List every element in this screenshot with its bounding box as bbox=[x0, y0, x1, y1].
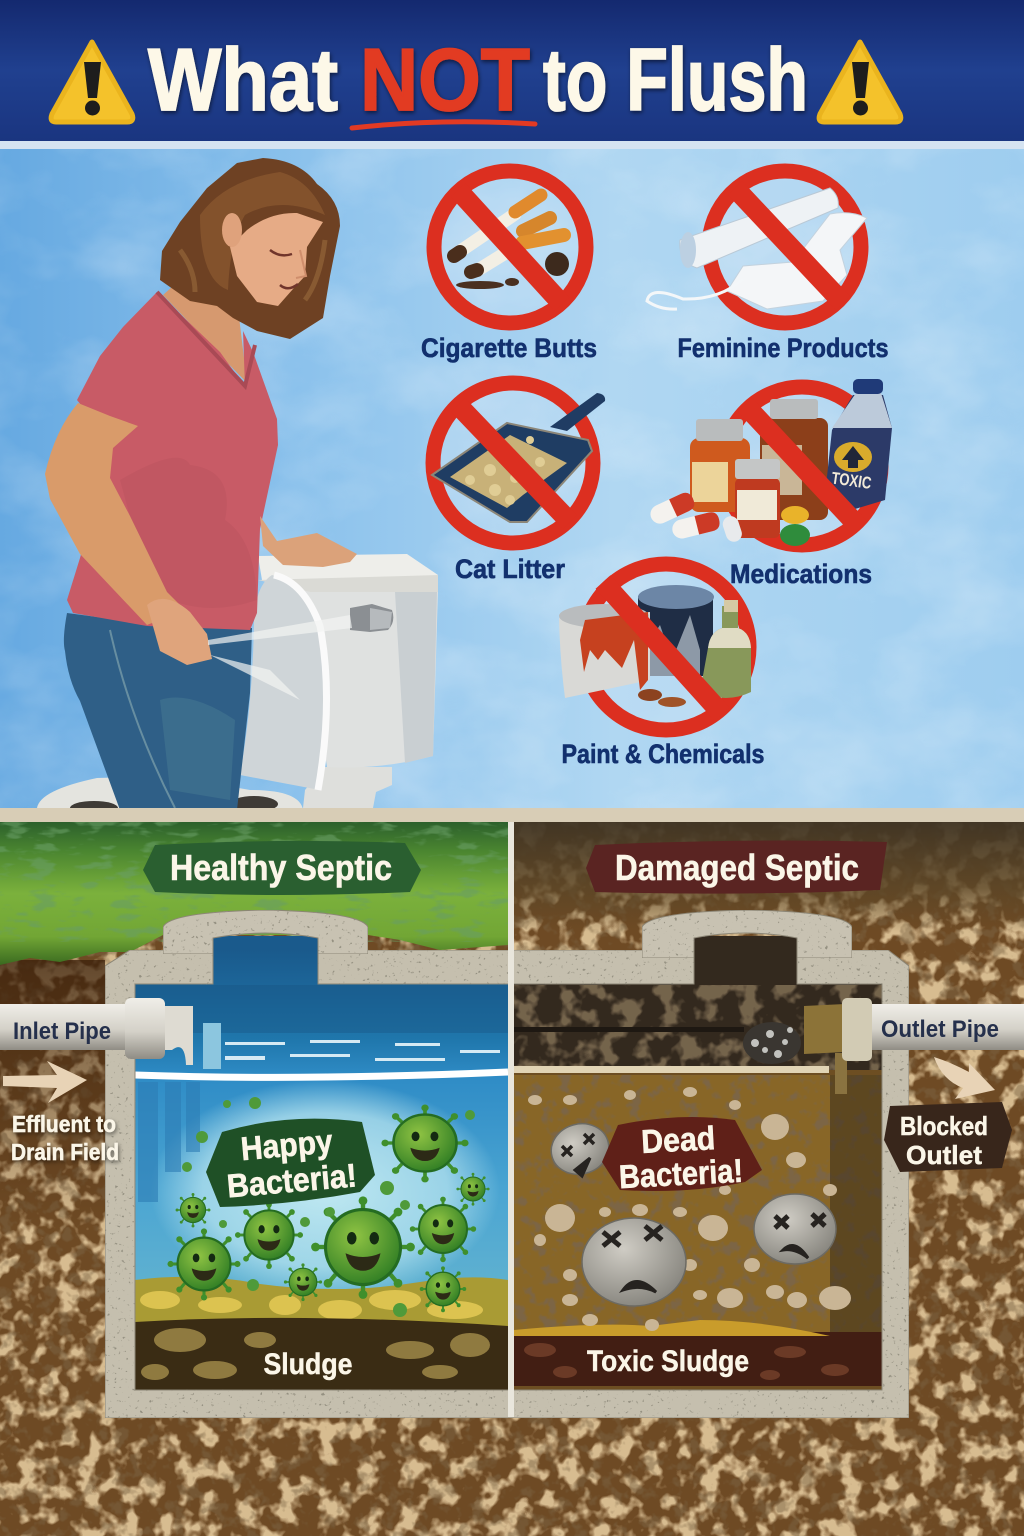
arrow: effluent bbox=[3, 1061, 87, 1103]
inlet drain streaks bbox=[138, 1082, 200, 1202]
right arm and hand bbox=[260, 516, 357, 567]
header banner bbox=[0, 0, 1024, 149]
inlet pipe: Inlet Pipe bbox=[13, 1018, 111, 1045]
icon: warning triangle right bbox=[819, 42, 901, 122]
label: effluent bbox=[11, 1111, 119, 1165]
grass bbox=[0, 822, 508, 965]
center divider bbox=[508, 822, 514, 1417]
prohibition slash bbox=[735, 188, 843, 303]
left hand bbox=[147, 599, 212, 665]
icon: litter scoop bbox=[432, 393, 605, 522]
label: healthy septic: Healthy Septic bbox=[170, 847, 392, 888]
title: What bbox=[148, 30, 338, 129]
label: healthy septic bbox=[143, 841, 421, 895]
label: blocked outlet: Outlet bbox=[906, 1140, 982, 1170]
label: happy bacteria: Happy bbox=[239, 1122, 335, 1167]
panel: sky background bbox=[0, 149, 1024, 809]
panel: damaged tank interior bbox=[514, 936, 884, 1390]
surface ripples bbox=[225, 1040, 500, 1061]
flush tube streaks bbox=[208, 615, 352, 700]
label: happy bacteria bbox=[206, 1119, 375, 1207]
neck bbox=[163, 286, 247, 383]
concrete access collar left bbox=[163, 910, 368, 954]
label: Medications bbox=[730, 559, 872, 589]
concrete tank walls bbox=[105, 950, 909, 1418]
prohibition ring bbox=[723, 387, 881, 545]
label: dead bacteria bbox=[602, 1117, 762, 1195]
label: happy bacteria: Bacteria! bbox=[225, 1156, 358, 1205]
panel: healthy tank interior bbox=[135, 936, 508, 1390]
outlet pipe: Outlet Pipe bbox=[881, 1016, 999, 1043]
label: effluent: Drain Field bbox=[11, 1139, 119, 1165]
label: effluent: Effluent to bbox=[12, 1111, 116, 1137]
concrete access collar right bbox=[642, 910, 852, 958]
shirt bbox=[67, 292, 278, 630]
ear bbox=[222, 213, 242, 247]
label: Feminine Products bbox=[678, 333, 888, 363]
icon: cigarettes bbox=[454, 195, 569, 289]
jeans bbox=[64, 613, 252, 810]
face bbox=[230, 213, 323, 306]
hair bbox=[160, 158, 340, 339]
label: toxic sludge: Toxic Sludge bbox=[587, 1345, 749, 1378]
label: damaged septic: Damaged Septic bbox=[615, 847, 859, 888]
panel: item paint and chemicals bbox=[559, 564, 764, 769]
label: sludge: Sludge bbox=[264, 1348, 352, 1381]
prohibition slash bbox=[458, 190, 562, 304]
outlet pipe bbox=[743, 998, 1024, 1094]
prohibition ring bbox=[709, 171, 861, 323]
label: dead bacteria: Bacteria! bbox=[618, 1152, 744, 1195]
panel: item feminine products bbox=[647, 171, 888, 363]
title underline bbox=[352, 122, 535, 128]
icon: medicine bottles: TOXIC bbox=[830, 468, 873, 493]
chart: happy bacteria colony bbox=[167, 1097, 490, 1317]
prohibition ring bbox=[434, 171, 586, 323]
toxic sludge layer bbox=[514, 1332, 884, 1386]
title bbox=[148, 30, 808, 129]
prohibition slash bbox=[458, 405, 570, 522]
icon: paint cans bbox=[559, 585, 751, 707]
panel: item medications bbox=[647, 379, 892, 589]
icon: pads and tampon bbox=[647, 188, 867, 309]
prohibition slash bbox=[603, 582, 722, 714]
panel: ground background bbox=[0, 808, 1024, 1536]
panel: item cat litter bbox=[432, 383, 605, 584]
label: blocked outlet bbox=[884, 1102, 1012, 1172]
illustration: woman bbox=[45, 158, 357, 810]
gravel blockage bbox=[743, 1022, 801, 1064]
label: Cat Litter bbox=[455, 554, 565, 584]
chart: dead bacteria colony bbox=[528, 1087, 851, 1331]
label: blocked outlet: Blocked bbox=[900, 1111, 988, 1141]
icon: warning triangle left bbox=[51, 42, 133, 122]
icon: medicine bottles bbox=[647, 379, 892, 546]
title: to Flush bbox=[543, 30, 808, 129]
inlet pipe bbox=[0, 998, 221, 1069]
panel: item cigarette butts bbox=[421, 171, 597, 363]
sludge layer bbox=[135, 1277, 508, 1390]
arrow: blocked bbox=[934, 1057, 995, 1099]
prohibition ring bbox=[583, 564, 749, 730]
label: Cigarette Butts bbox=[421, 333, 597, 363]
label: damaged septic bbox=[586, 841, 887, 894]
prohibition slash bbox=[745, 405, 860, 528]
title: NOT bbox=[360, 30, 530, 129]
label: dead bacteria: Dead bbox=[640, 1119, 716, 1160]
label: Paint & Chemicals bbox=[562, 739, 764, 769]
illustration: toilet bbox=[37, 554, 438, 815]
left arm bbox=[45, 403, 185, 625]
prohibition ring bbox=[433, 383, 593, 543]
